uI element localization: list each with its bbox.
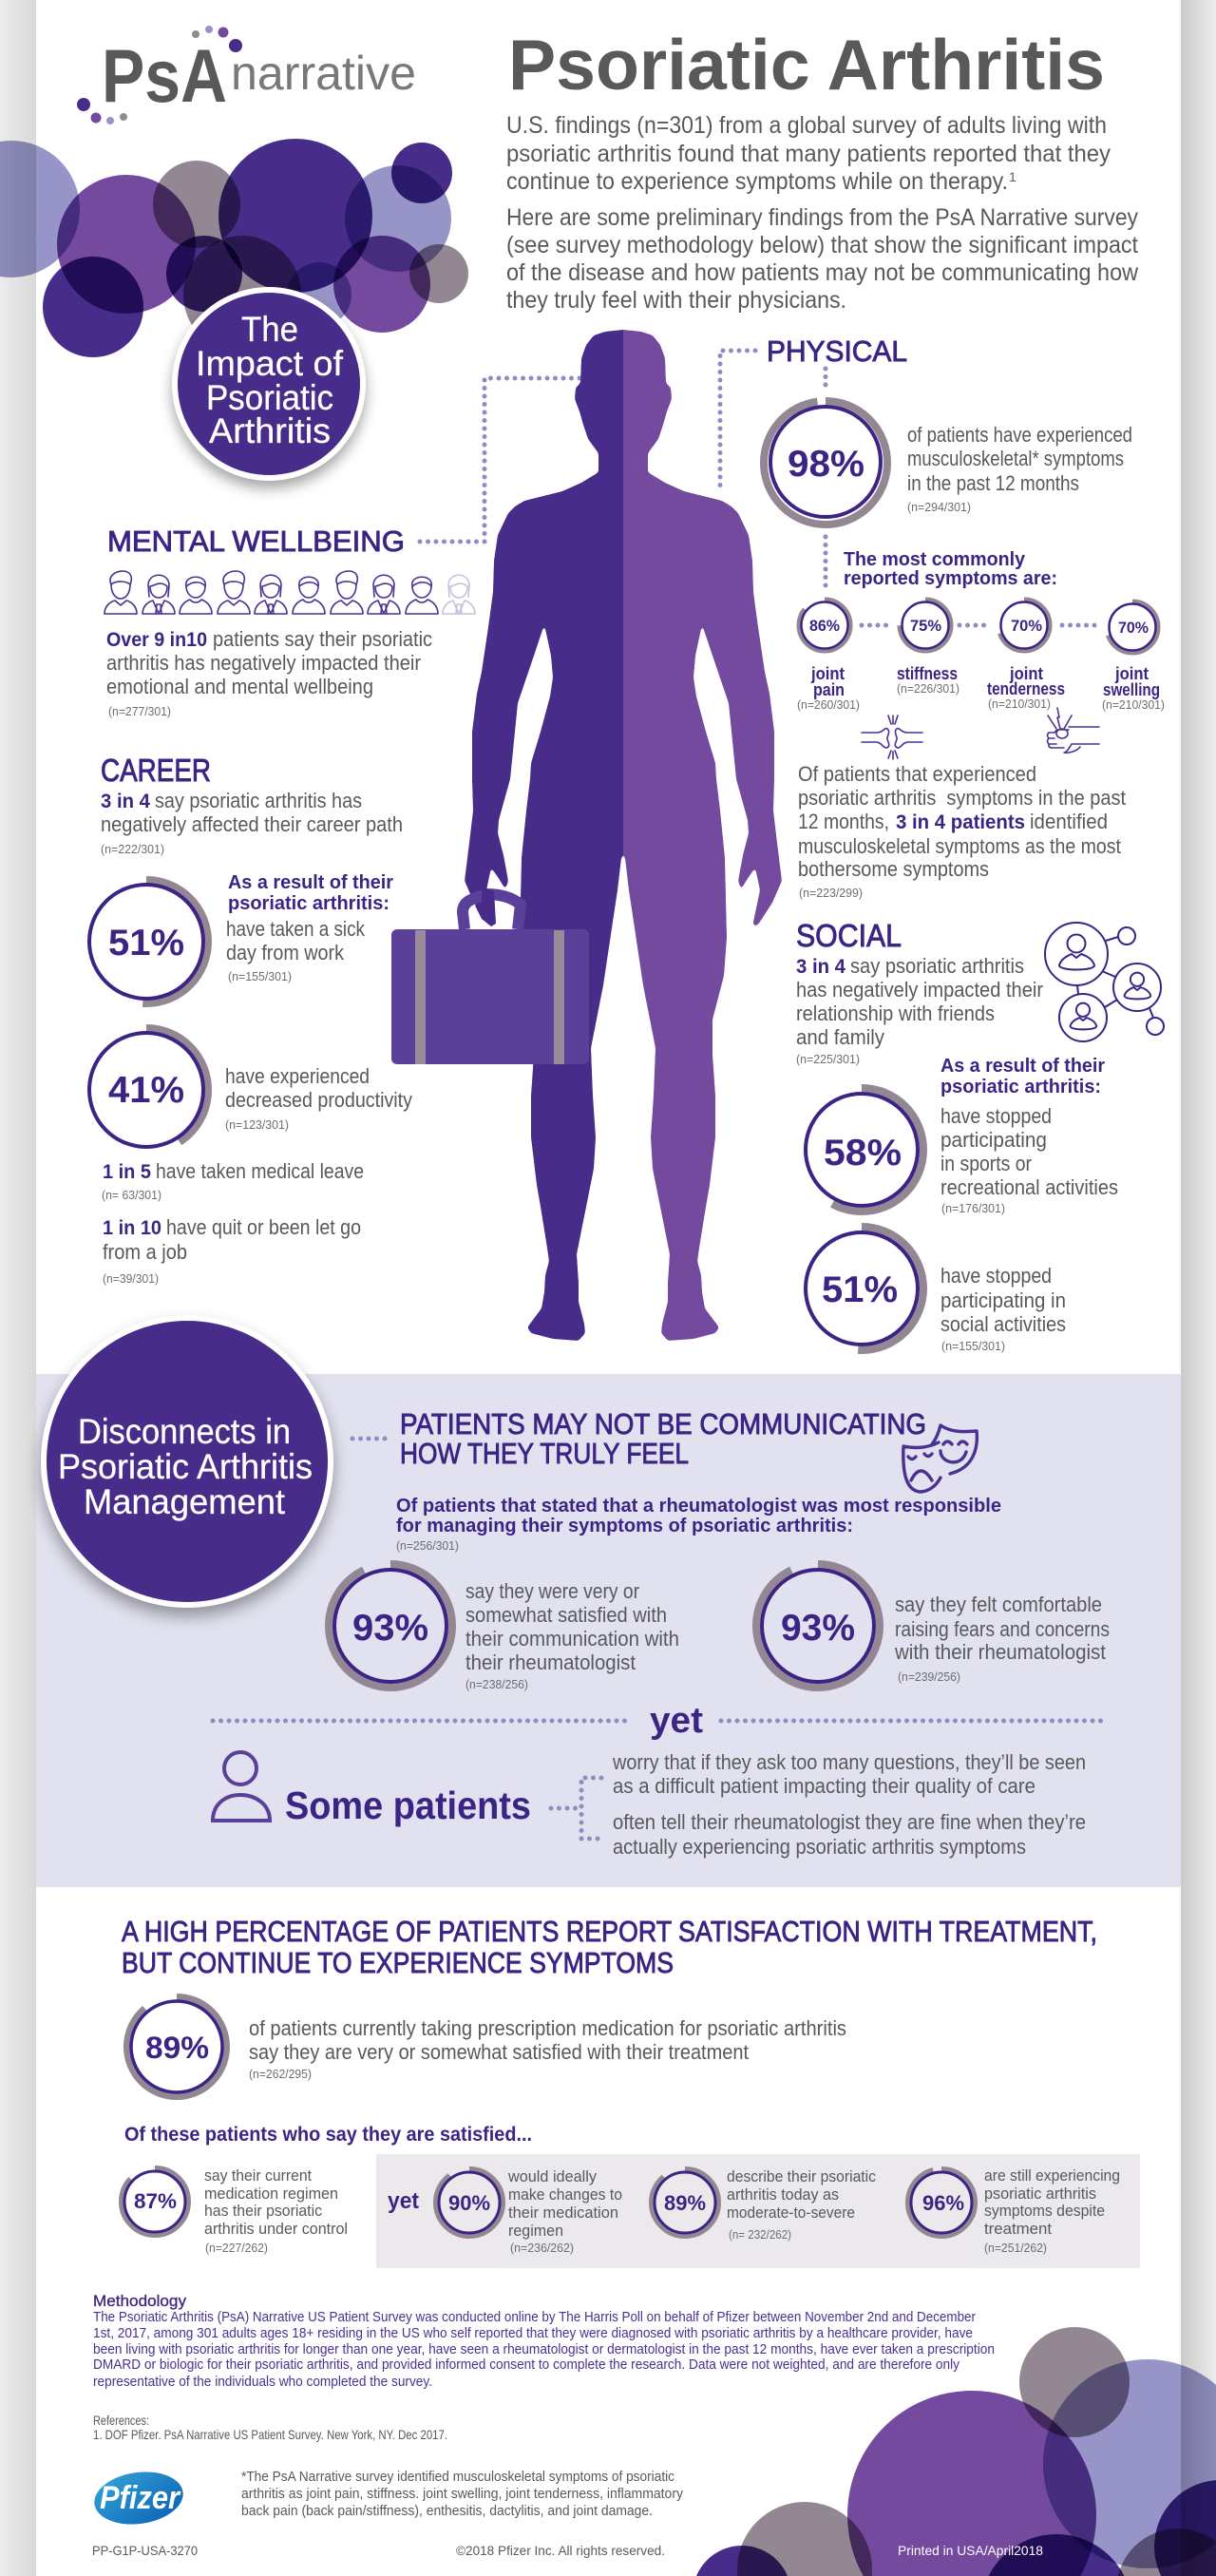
panel: yet box: yet <box>388 2188 419 2214</box>
text: most bothersome symptoms <box>798 762 1126 900</box>
text: some patients statements: often tell their rheumatologist they are fine when they’re <box>613 1810 1086 1834</box>
stat: 93% comfortable raising fears: (n=239/256) <box>898 1670 960 1684</box>
stat: 1 in 5 medical leave <box>102 1159 364 1202</box>
circle: the impact of psoriatic arthritis: The <box>241 310 298 349</box>
stat: 58% stopped sports: recreational activities <box>940 1175 1118 1199</box>
intro text: continue to experience symptoms while on therapy. <box>506 168 1008 195</box>
section: social: SOCIAL <box>796 918 902 953</box>
stat: 98% musculoskeletal: in the past 12 months <box>907 471 1079 495</box>
section: satisfaction with treatment: BUT CONTINUE TO EXPERIENCE SYMPTOMS <box>122 1946 674 1979</box>
stat: 58% stopped sports: in sports or <box>940 1152 1032 1175</box>
stat: 51% sick day: (n=155/301) <box>228 969 292 983</box>
text: most bothersome symptoms: 12 months, <box>798 810 889 833</box>
section: mental wellbeing: patients say their psoriatic <box>213 627 432 651</box>
stat: 93% comfortable raising fears: 93% <box>781 1608 855 1649</box>
stat: 93% comfortable raising fears: with their rheumatologist <box>894 1640 1106 1664</box>
stat: 70% joint swelling: swelling <box>1103 680 1160 699</box>
stat: 89% moderate-to-severe: moderate-to-severe <box>727 2204 855 2222</box>
stat: 87% under control: say their current <box>204 2166 312 2185</box>
icon: hand with pain bolts <box>1047 708 1099 753</box>
section: social: and family <box>796 1025 884 1049</box>
text: methodology: representative of the individuals who completed the survey. <box>93 2374 432 2390</box>
stat: 93% satisfied with communication: say they were very or <box>466 1579 639 1603</box>
section: mental wellbeing: emotional and mental wellbeing <box>106 675 373 698</box>
section: physical: PHYSICAL <box>767 334 907 368</box>
stat: 86% joint pain: pain <box>813 680 845 699</box>
panel: disconnects band background <box>36 1374 1181 1887</box>
stat: 70% joint swelling: (n=210/301) <box>1102 697 1165 712</box>
section: mental wellbeing: arthritis has negatively impacted their <box>106 651 421 675</box>
section: satisfaction with treatment: A HIGH PERCENTAGE OF PATIENTS REPORT SATISFACTION WITH TREATMENT, <box>122 1915 1097 1948</box>
stat: 89% moderate-to-severe: arthritis today as <box>727 2185 839 2204</box>
stat: 90% make changes: regimen <box>508 2222 563 2240</box>
stat: 58% stopped sports <box>800 1088 1118 1215</box>
section: satisfaction with treatment: Of these patients who say they are satisfied... <box>124 2124 532 2146</box>
stat: 90% make changes: (n=236/262) <box>510 2241 574 2255</box>
stat: 86% joint pain <box>797 600 860 712</box>
stat: 96% still experiencing symptoms: symptoms despite <box>984 2202 1105 2220</box>
stat: 41% decreased productivity: have experienced <box>225 1064 370 1088</box>
stat: 93% satisfied with communication <box>329 1564 679 1691</box>
stat: 98% musculoskeletal: (n=294/301) <box>907 500 971 514</box>
logo: PsA narrative <box>77 26 416 124</box>
section: social: As a result of their <box>940 1056 1105 1077</box>
stat: 70% joint tenderness: tenderness <box>987 679 1065 698</box>
stat: 89% satisfied: (n=262/295) <box>249 2067 312 2081</box>
stat: 87% under control: (n=227/262) <box>205 2241 268 2255</box>
text: methodology: Methodology <box>93 2292 187 2310</box>
text: references: References: <box>93 2413 149 2428</box>
decorative bubbles: top <box>0 139 468 357</box>
section: career: negatively affected their career path <box>101 812 403 836</box>
stat: 51% sick day: day from work <box>226 941 345 964</box>
stat: 70% joint tenderness: (n=210/301) <box>988 696 1051 711</box>
stat: 41% decreased productivity: decreased productivity <box>225 1088 412 1112</box>
stat: 1 in 5 medical leave: 1 in 5 <box>103 1161 151 1183</box>
text: most bothersome symptoms: identified <box>1030 810 1108 833</box>
text: methodology: DMARD or biologic for their psoriatic arthritis, and provided informed consent to complete the research. Data were not weighted, and are therefore only <box>93 2357 960 2373</box>
stat: 89% moderate-to-severe <box>652 2167 876 2242</box>
stat: 87% under control <box>122 2166 348 2255</box>
footer line <box>92 2543 1043 2558</box>
stat: 75% stiffness: stiffness <box>897 664 958 683</box>
stat: 86% joint pain: joint <box>810 664 845 683</box>
intro text <box>506 112 1139 314</box>
text: footnote: back pain (back pain/stiffness), enthesitis, dactylitis, and joint damage. <box>241 2503 653 2519</box>
stat: 98% musculoskeletal <box>764 401 1132 525</box>
section: social <box>796 918 1164 1353</box>
stat: 51% sick day: have taken a sick <box>226 917 366 941</box>
stat: 1 in 10 quit job <box>103 1215 361 1286</box>
icon: joint <box>862 716 922 759</box>
text: some patients statements <box>612 1750 1086 1859</box>
section: career: say psoriatic arthritis has <box>155 789 362 812</box>
stat: 1 in 10 quit job: 1 in 10 <box>103 1217 162 1239</box>
stat: 86% joint pain: 86% <box>809 617 840 635</box>
stat: 90% make changes: would ideally <box>507 2167 597 2185</box>
stat: 98% musculoskeletal: of patients have experienced <box>907 423 1132 447</box>
stat: 89% moderate-to-severe: (n= 232/262) <box>729 2227 791 2242</box>
circle: the impact of psoriatic arthritis <box>172 287 366 481</box>
section: communication: (n=256/301) <box>396 1538 459 1553</box>
stat: 93% satisfied with communication: somewhat satisfied with <box>466 1603 667 1627</box>
section: career: CAREER <box>101 753 211 788</box>
text: most bothersome symptoms: bothersome symptoms <box>798 857 989 881</box>
stat: 93% comfortable raising fears: say they felt comfortable <box>895 1593 1102 1616</box>
circle: disconnects in psoriatic arthritis management: Management <box>84 1482 286 1521</box>
text: methodology: The Psoriatic Arthritis (PsA) Narrative US Patient Survey was conducted online by The Harris Poll on behalf of Pfizer between November 2nd and December <box>93 2309 976 2325</box>
section: mental wellbeing: Over 9 in10 <box>106 629 207 651</box>
divider: yet: yet <box>650 1701 703 1741</box>
intro text: they truly feel with their physicians. <box>506 287 846 314</box>
stat: 96% still experiencing symptoms: are still experiencing <box>984 2166 1120 2185</box>
stat: 1 in 10 quit job: (n=39/301) <box>103 1271 159 1286</box>
text: footnote <box>241 2469 683 2519</box>
stat: 70% joint tenderness <box>987 600 1065 711</box>
logo: PsA narrative: narrative <box>231 47 416 100</box>
icon: person <box>213 1752 270 1821</box>
section: mental wellbeing: MENTAL WELLBEING <box>107 525 405 558</box>
section: social: relationship with friends <box>796 1002 995 1025</box>
section: physical <box>764 334 1165 900</box>
stat: 93% satisfied with communication: their rheumatologist <box>466 1651 636 1674</box>
stat: 90% make changes: 90% <box>448 2191 490 2215</box>
stat: 96% still experiencing symptoms <box>908 2166 1120 2255</box>
stat: 51% stopped social activities: (n=155/301) <box>941 1339 1005 1353</box>
stat: 96% still experiencing symptoms: psoriatic arthritis <box>984 2185 1096 2203</box>
intro text: U.S. findings (n=301) from a global survey of adults living with <box>506 112 1107 139</box>
connector: some patients <box>551 1778 604 1839</box>
text: most bothersome symptoms: psoriatic arthritis symptoms in the past <box>798 786 1126 810</box>
stat: 51% sick day: 51% <box>108 923 184 964</box>
stat: 96% still experiencing symptoms: treatment <box>984 2220 1052 2238</box>
intro text: Here are some preliminary findings from the PsA Narrative survey <box>506 204 1138 231</box>
circle: disconnects in psoriatic arthritis management: Psoriatic Arthritis <box>58 1447 313 1486</box>
logo: Pfizer: Pfizer <box>100 2480 181 2516</box>
stat: 41% decreased productivity: (n=123/301) <box>225 1117 289 1132</box>
connector: physical to shoulder <box>720 351 755 489</box>
stat: 87% under control: arthritis under control <box>204 2220 348 2238</box>
section: social: say psoriatic arthritis <box>850 954 1024 978</box>
section: career: (n=222/301) <box>101 842 164 856</box>
stat: 89% satisfied: say they are very or somewhat satisfied with their treatment <box>249 2040 749 2064</box>
icon: row of ten people <box>104 571 475 614</box>
icon: theatre masks <box>903 1425 977 1492</box>
stat: 51% sick day <box>85 880 366 1003</box>
stat: 96% still experiencing symptoms: 96% <box>922 2191 964 2215</box>
circle: the impact of psoriatic arthritis: Psoriatic <box>206 378 333 417</box>
stat: 89% satisfied: of patients currently taking prescription medication for psoriatic arthritis <box>249 2016 846 2040</box>
stat: 70% joint swelling: 70% <box>1118 619 1149 637</box>
stat: 87% under control: medication regimen <box>204 2185 338 2203</box>
stat: 51% stopped social activities: social activities <box>940 1312 1066 1336</box>
text: references <box>93 2413 447 2442</box>
intro text: 1 <box>1009 169 1016 184</box>
footer line: ©2018 Pfizer Inc. All rights reserved. <box>456 2543 665 2558</box>
stat: 90% make changes: make changes to <box>508 2185 622 2204</box>
section: social: 3 in 4 <box>796 956 846 978</box>
stat: 96% still experiencing symptoms: (n=251/262) <box>984 2241 1047 2255</box>
footer line: Printed in USA/April2018 <box>898 2543 1043 2558</box>
text: footnote: arthritis as joint pain, stiffness. joint swelling, joint tenderness, inflammatory <box>241 2486 683 2502</box>
text: footnote: *The PsA Narrative survey identified musculoskeletal symptoms of psoriatic <box>241 2469 674 2485</box>
stat: 51% stopped social activities: 51% <box>822 1269 898 1310</box>
stat: 75% stiffness: (n=226/301) <box>897 681 960 696</box>
text: references: 1. DOF Pfizer. PsA Narrative US Patient Survey. New York, NY. Dec 2017. <box>93 2427 447 2442</box>
text: some patients statements: actually experiencing psoriatic arthritis symptoms <box>613 1835 1026 1859</box>
text: methodology <box>93 2292 995 2390</box>
section: career: psoriatic arthritis: <box>228 893 390 914</box>
section: social: has negatively impacted their <box>796 978 1043 1002</box>
circle: the impact of psoriatic arthritis: Arthritis <box>209 411 331 450</box>
stat: 1 in 5 medical leave: (n= 63/301) <box>102 1188 162 1202</box>
section: communication: Of patients that stated that a rheumatologist was most responsible <box>396 1496 1001 1517</box>
stat: 41% decreased productivity: 41% <box>108 1070 184 1111</box>
text: some patients statements: worry that if they ask too many questions, they’ll be seen <box>612 1750 1086 1774</box>
stat: 1 in 5 medical leave: have taken medical leave <box>156 1159 364 1183</box>
text: methodology: been living with psoriatic arthritis for longer than one year, have seen a rheumatologist or dermatologist in the past 12 months, have ever taken a prescription <box>93 2341 995 2357</box>
intro text: of the disease and how patients may not be communicating how <box>506 259 1139 286</box>
section: career <box>85 753 412 1286</box>
section: mental wellbeing: (n=277/301) <box>108 704 171 718</box>
text: most bothersome symptoms: musculoskeletal symptoms as the most <box>798 834 1121 858</box>
connector: mental wellbeing to head <box>418 378 580 542</box>
icon: social network <box>1045 923 1164 1041</box>
text: most bothersome symptoms: Of patients that experienced <box>798 762 1036 786</box>
stat: 93% comfortable raising fears <box>756 1564 1110 1688</box>
stat: 93% satisfied with communication: (n=238/256) <box>466 1677 528 1691</box>
stat: 87% under control: has their psoriatic <box>204 2202 322 2220</box>
section: career: As a result of their <box>228 872 393 893</box>
stat: 89% satisfied: 89% <box>145 2031 209 2065</box>
section: communication <box>213 1407 1110 1859</box>
stat: 87% under control: 87% <box>134 2189 177 2213</box>
logo: Pfizer <box>91 2467 186 2529</box>
stat: 90% make changes: their medication <box>508 2204 618 2222</box>
circle: disconnects in psoriatic arthritis management: Disconnects in <box>78 1412 291 1451</box>
stat: 90% make changes <box>435 2167 622 2255</box>
section: communication: HOW THEY TRULY FEEL <box>400 1437 689 1470</box>
stat: 89% moderate-to-severe: 89% <box>664 2191 706 2215</box>
stat: 70% joint swelling: joint <box>1114 664 1149 683</box>
stat: 98% musculoskeletal: 98% <box>788 444 864 485</box>
text: methodology: 1st, 2017, among 301 adults ages 18+ residing in the US who self reported that they were diagnosed with psoriatic arthritis by a healthcare provider, have <box>93 2325 973 2341</box>
stat: 51% stopped social activities <box>800 1227 1066 1353</box>
stat: 51% stopped social activities: participating in <box>940 1288 1066 1312</box>
stat: 89% satisfied <box>127 1997 846 2096</box>
stat: 41% decreased productivity <box>85 1028 412 1152</box>
stat: 70% joint tenderness: joint <box>1009 664 1043 683</box>
stat: 98% musculoskeletal: musculoskeletal* symptoms <box>907 447 1124 470</box>
briefcase <box>391 888 589 1064</box>
text: some patients statements: as a difficult patient impacting their quality of care <box>613 1774 1036 1798</box>
logo: PsA narrative: PsA <box>102 33 227 118</box>
stat: 58% stopped sports: participating <box>940 1128 1047 1152</box>
title: Psoriatic Arthritis <box>508 25 1105 105</box>
stat: 58% stopped sports: have stopped <box>940 1104 1052 1128</box>
section: social: psoriatic arthritis: <box>940 1077 1101 1097</box>
section: mental wellbeing <box>104 525 475 718</box>
stat: 1 in 10 quit job: from a job <box>103 1240 187 1264</box>
stat: 89% moderate-to-severe: describe their psoriatic <box>727 2167 876 2185</box>
section: social: (n=225/301) <box>796 1052 860 1066</box>
circle: disconnects in psoriatic arthritis management <box>41 1315 333 1608</box>
stat: 70% joint tenderness: 70% <box>1011 617 1042 635</box>
body silhouette with briefcase <box>391 329 782 1341</box>
stat: 75% stiffness <box>897 600 960 696</box>
text: most bothersome symptoms: (n=223/299) <box>799 886 863 900</box>
stat: 93% satisfied with communication: their communication with <box>466 1627 679 1651</box>
section: physical: reported symptoms are: <box>844 568 1057 589</box>
footer line: PP-G1P-USA-3270 <box>92 2543 198 2558</box>
intro text: psoriatic arthritis found that many patients reported that they <box>506 141 1111 167</box>
panel: yet box <box>376 2154 1140 2268</box>
section: satisfaction with treatment <box>122 1915 1140 2268</box>
section: communication: PATIENTS MAY NOT BE COMMUNICATING <box>400 1407 926 1441</box>
circle: the impact of psoriatic arthritis: Impact of <box>196 344 344 383</box>
stat: 1 in 10 quit job: have quit or been let go <box>166 1215 361 1239</box>
stat: 58% stopped sports: 58% <box>824 1133 902 1174</box>
stat: 75% stiffness: 75% <box>910 617 941 635</box>
heading: some patients: Some patients <box>285 1784 531 1827</box>
stat: 51% stopped social activities: have stopped <box>940 1264 1052 1288</box>
stat: 86% joint pain: (n=260/301) <box>797 697 860 712</box>
section: physical: The most commonly <box>844 549 1026 570</box>
intro text: (see survey methodology below) that show the significant impact <box>506 232 1138 258</box>
stat: 70% joint swelling <box>1102 601 1165 712</box>
stat: 93% satisfied with communication: 93% <box>352 1608 428 1649</box>
section: communication: for managing their symptoms of psoriatic arthritis: <box>396 1516 853 1536</box>
text: most bothersome symptoms: 3 in 4 patients <box>896 811 1025 833</box>
stat: 58% stopped sports: (n=176/301) <box>941 1201 1005 1215</box>
section: career: 3 in 4 <box>101 791 150 812</box>
stat: 93% comfortable raising fears: raising fears and concerns <box>895 1617 1110 1641</box>
decorative bubbles: bottom <box>693 2327 1216 2576</box>
